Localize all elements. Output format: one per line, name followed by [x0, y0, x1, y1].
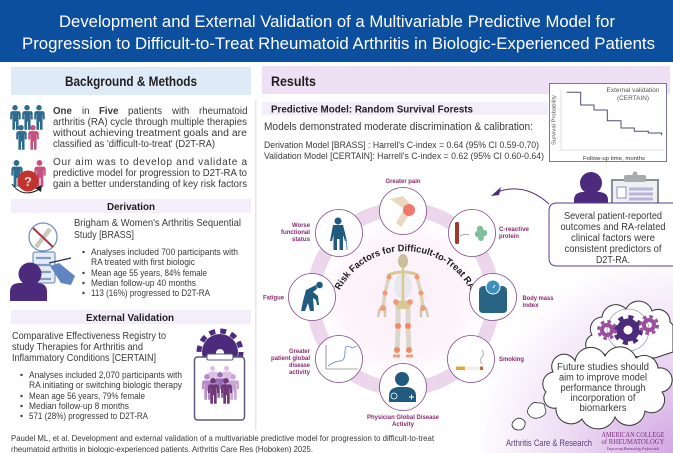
factor: patient global disease activity: Greater: [289, 348, 310, 355]
text: one in five: with: [171, 106, 189, 117]
callout: consistent predictors: [549, 203, 673, 266]
factor: body mass index: Body mass: [522, 295, 554, 302]
heading: derivation: Derivation: [107, 201, 155, 213]
text: CERTAIN registry: [12, 331, 166, 364]
thought cloud: gears: [586, 301, 673, 358]
heading: predictive model: [262, 102, 548, 116]
list: validation details: [20, 370, 182, 421]
journal name: Arthritis Care & Research: [506, 438, 592, 448]
factor: patient global disease activity: activity: [289, 369, 310, 376]
heading: background and methods: [11, 67, 251, 95]
title banner: [0, 0, 673, 62]
factor: C-reactive protein: C-reactive: [499, 226, 529, 233]
factor: physician global disease activity: [367, 364, 439, 428]
heading: external validation: External Validation: [86, 312, 174, 324]
factor: fatigue: Fatigue: [263, 294, 284, 302]
factor: worse functional status: status: [292, 236, 310, 243]
text: study aim: predictive model for progression to D2T-RA to: [53, 168, 247, 179]
heading: external validation: [11, 310, 251, 324]
chart: survival curve: [550, 84, 666, 162]
factor: body mass index: index: [522, 302, 539, 309]
callout: consistent predictors: D2T-RA.: [596, 255, 630, 266]
title banner: Progression to Difficult-to-Treat Rheumatoid Arthritis in Biologic-Experienced Patients: [22, 35, 655, 53]
text: one in five: arthritis (RA) cycle through multiple therapies: [53, 117, 247, 128]
thought cloud: future studies: [543, 347, 672, 429]
factor: patient global disease activity: [271, 336, 362, 382]
arrow: callout to risk factors: [491, 187, 549, 204]
icon: one in five patients: [10, 105, 45, 150]
thought cloud: future studies: incorporation of: [570, 393, 636, 404]
text: CERTAIN registry: Comparative Effectiveness Registry to: [12, 331, 166, 342]
factor: body mass index: [470, 274, 554, 320]
callout: consistent predictors: Several patient-reported: [564, 211, 662, 222]
chart: survival curve: Survival Probability: [552, 95, 558, 145]
thought cloud: future studies: aim to improve model: [559, 372, 647, 384]
factor: smoking: [448, 336, 524, 382]
heading: derivation: [11, 199, 251, 213]
icon: patients and question mark: [11, 160, 46, 193]
text: one in five: One: [53, 106, 72, 117]
factor: C-reactive protein: protein: [499, 233, 519, 240]
text: one in five: Five: [99, 106, 119, 117]
factor: physician global disease activity: Activity: [392, 421, 414, 428]
logo: American College of Rheumatology: Empowering Rheumatology Professionals: [606, 446, 659, 451]
logo: American College of Rheumatology: of RHEUMATOLOGY: [602, 438, 664, 446]
icon: registry clipboard with gear: [194, 331, 244, 420]
citation: [11, 433, 435, 453]
icon: patients and question mark: ?: [24, 174, 32, 189]
icon: no biologic syringe: [29, 223, 57, 251]
text: model performance: Derivation Model [BRASS] : Harrell's C-index = 0.64 (95% CI 0.59-0.70): [264, 140, 539, 150]
text: BRASS study: [74, 218, 241, 241]
factor: worse functional status: Worse: [292, 222, 310, 229]
heading: predictive model: Predictive Model: Random Survival Forests: [271, 104, 473, 116]
callout: consistent predictors: consistent predictors of: [564, 244, 662, 255]
text: BRASS study: Study [BRASS]: [74, 230, 134, 241]
logo: American College of Rheumatology: [602, 431, 664, 451]
text: one in five: [52, 106, 247, 150]
thought cloud: future studies: performance through: [560, 383, 646, 394]
text: model performance: Models demonstrated moderate discrimination & calibration:: [264, 121, 533, 133]
text: one in five: in: [82, 106, 90, 117]
logo: American College of Rheumatology: AMERICAN COLLEGE: [602, 431, 664, 439]
risk factor ring: [313, 209, 493, 389]
text: study aim: gain a better understanding of key risk factors: [53, 179, 247, 190]
small thought bubbles: [512, 402, 546, 430]
text: study aim: [53, 157, 247, 190]
factor: C-reactive protein: [448, 210, 529, 256]
list: derivation details: 113 (16%) progressed to D2T-RA: [91, 288, 211, 298]
factor: smoking: Smoking: [499, 356, 524, 363]
list: derivation details: Mean age 55 years, 84% female: [91, 268, 207, 278]
text: one in five: without achieving treatment goals and are: [52, 128, 247, 139]
icon: patient filling a form: [10, 252, 75, 301]
heading: results: [262, 66, 670, 94]
list: validation details: RA initiating or switching biologic therapy: [29, 380, 182, 390]
list: validation details: Mean age 56 years, 79% female: [29, 391, 145, 401]
chart: survival curve: Follow-up time, months: [583, 156, 645, 162]
chart: survival curve: (CERTAIN): [617, 96, 649, 102]
text: one in five: patients: [128, 106, 162, 117]
list: validation details: 571 (28%) progressed to D2T-RA: [29, 411, 149, 421]
factor: greater pain: Greater pain: [386, 178, 420, 185]
title banner: Development and External Validation of a Multivariable Predictive Model for: [59, 13, 616, 31]
callout: consistent predictors: outcomes and RA-related: [560, 222, 666, 233]
citation: Paudel ML, et al. Development and external validation of a multivariable predictive model for progression to difficult-to-treat: [11, 433, 435, 443]
thought cloud: future studies: biomarkers: [580, 403, 626, 414]
text: CERTAIN registry: Inflammatory Conditions [CERTAIN]: [12, 353, 156, 364]
list: validation details: Analyses included 2,070 participants with: [29, 370, 182, 380]
factor: patient global disease activity: disease: [289, 362, 310, 369]
illustration: skeleton body with inflamed joints: [378, 254, 428, 356]
text: model performance: Validation Model [CERTAIN]: Harrell's C-index = 0.62 (95% CI 0.60-0.64): [264, 151, 544, 161]
list: derivation details: Analyses included 700 participants with: [91, 247, 238, 257]
heading: results: Results: [271, 74, 316, 89]
callout: consistent predictors: clinical factors were: [571, 233, 655, 244]
factor: fatigue: [263, 274, 336, 320]
curved heading: risk factors: Risk Factors for Difficult-to-Treat RA: [334, 244, 474, 290]
text: one in five: classified as 'difficult-to-treat' (D2T-RA): [53, 139, 215, 150]
factor: patient global disease activity: patient global: [271, 355, 310, 362]
text: model performance: [264, 121, 544, 161]
chart: survival curve: External validation: [606, 88, 660, 94]
heading: background and methods: Background & Methods: [65, 74, 197, 89]
factor: greater pain: [380, 178, 426, 234]
list: derivation details: RA treated with first biologic: [91, 257, 195, 267]
text: study aim: Our aim was to develop and validate a: [53, 157, 247, 168]
text: BRASS study: Brigham & Women's Arthritis Sequential: [74, 218, 241, 229]
list: derivation details: Median follow-up 40 months: [91, 278, 196, 288]
factor: worse functional status: functional: [281, 229, 310, 236]
list: validation details: Median follow-up 8 months: [29, 401, 129, 411]
factor: physician global disease activity: Physician Global Disease: [367, 414, 439, 421]
icon: patient and clipboard: [574, 172, 658, 204]
text: CERTAIN registry: study Therapies for Arthritis and: [12, 342, 143, 353]
list: derivation details: [82, 247, 238, 298]
factor: worse functional status: [281, 210, 362, 256]
background tint: [256, 200, 673, 453]
thought cloud: future studies: Future studies should: [557, 362, 649, 373]
text: one in five: rheumatoid: [199, 106, 247, 117]
